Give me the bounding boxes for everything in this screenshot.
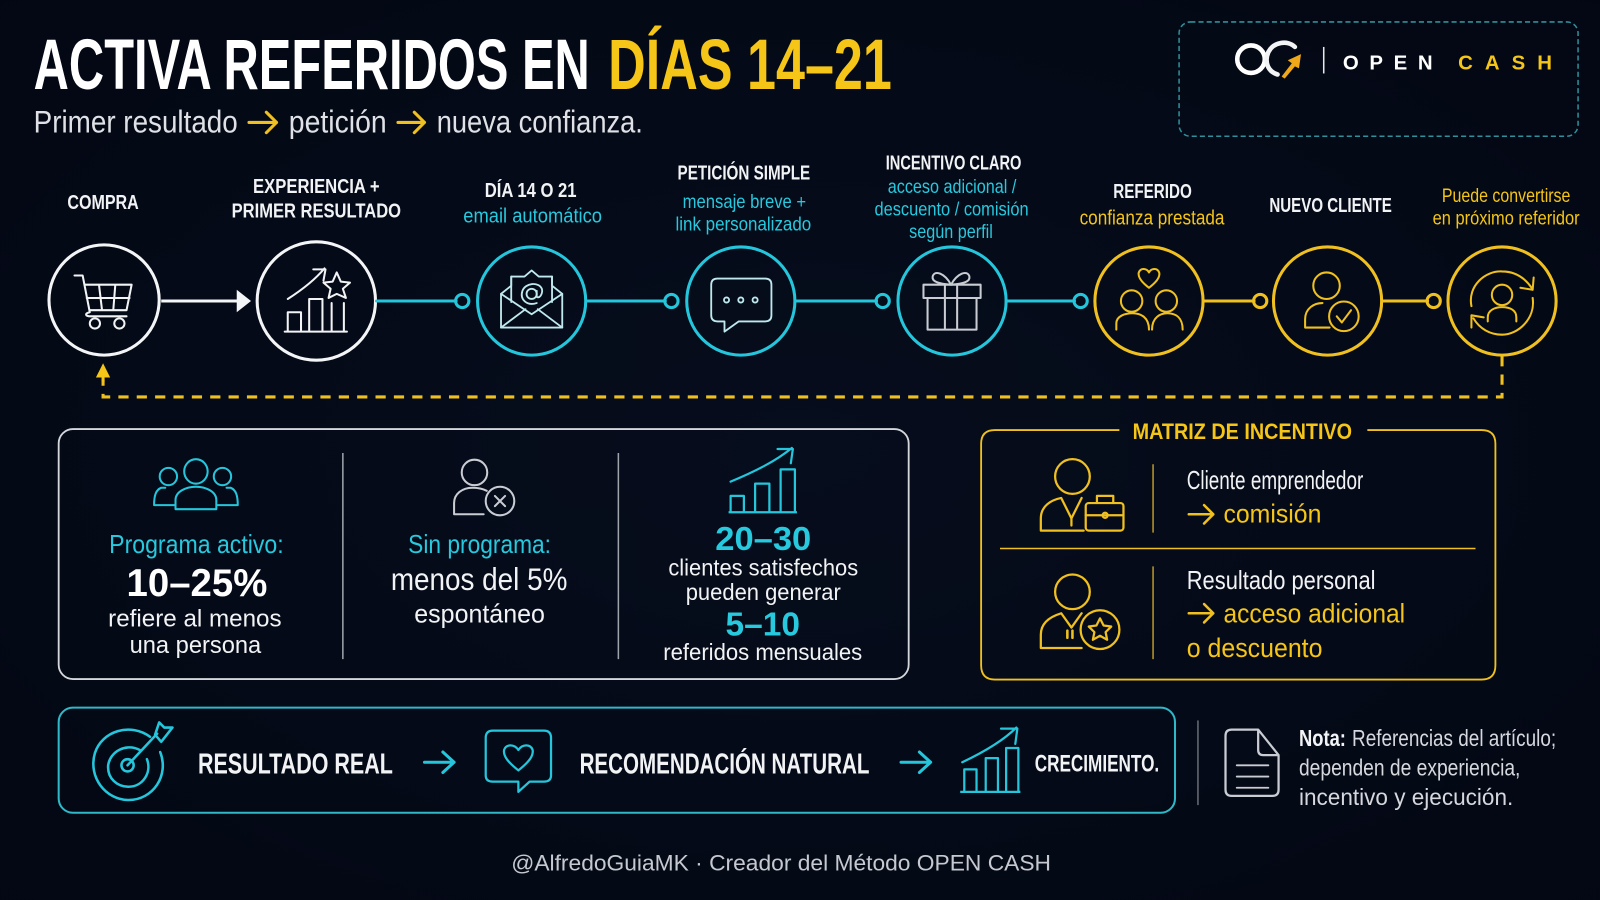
panel: conclusion band: RECOMENDACIÓN NATURAL	[580, 746, 869, 780]
step: referido: confianza prestada	[1080, 207, 1225, 229]
subtitle: nueva confianza.	[437, 104, 643, 140]
note: Referencias del artículo;	[1352, 725, 1556, 751]
stat: programa activo: refiere al menos	[108, 606, 282, 633]
panel: conclusion band	[59, 708, 1175, 813]
stat: programa activo	[108, 459, 284, 659]
step: peticion: PETICIÓN SIMPLE	[678, 161, 810, 185]
row: cliente emprendedor: Cliente emprendedor	[1187, 467, 1364, 495]
step: experiencia: PRIMER RESULTADO	[232, 200, 401, 222]
icon: person with x	[454, 460, 514, 515]
stat: referidos mensuales: pueden generar	[686, 579, 841, 605]
row: resultado personal: acceso adicional	[1223, 598, 1405, 628]
footer: @AlfredoGuiaMK · Creador del Método OPEN CASH	[511, 850, 1051, 875]
step: referido: REFERIDO	[1113, 181, 1192, 203]
row: resultado personal: Resultado personal	[1187, 567, 1376, 595]
stat: referidos mensuales: referidos mensuales	[663, 639, 862, 665]
icon: document	[1226, 730, 1279, 796]
step: incentivo	[874, 152, 1029, 355]
step: peticion: mensaje breve +	[683, 191, 806, 213]
stat: referidos mensuales: clientes satisfechos	[668, 555, 858, 581]
subtitle: petición	[289, 104, 387, 140]
stat: programa activo: una persona	[130, 632, 262, 659]
icon: person cycle	[1471, 271, 1534, 335]
connector 7-8	[1383, 294, 1440, 308]
logo box: CASH	[1458, 52, 1552, 74]
panel: conclusion band: CRECIMIENTO.	[1035, 750, 1159, 777]
subtitle: Primer resultado	[34, 104, 238, 140]
step: peticion: link personalizado	[676, 214, 811, 236]
title: ACTIVA REFERIDOS EN	[34, 25, 590, 105]
step: peticion	[676, 161, 811, 355]
step: dia 14 o 21: DÍA 14 O 21	[485, 179, 577, 202]
icon: heart bubble	[486, 731, 551, 792]
step: incentivo: acceso adicional /	[888, 176, 1017, 198]
row: resultado personal: o descuento	[1187, 633, 1322, 663]
title: DÍAS 14–21	[608, 25, 892, 105]
step: compra: COMPRA	[67, 192, 139, 214]
step: incentivo: INCENTIVO CLARO	[886, 152, 1021, 174]
step: dia 14 o 21	[463, 179, 602, 355]
subtitle	[34, 104, 643, 140]
connector 6-7	[1204, 294, 1267, 308]
arrow: compra to experiencia	[161, 290, 251, 312]
step: experiencia: EXPERIENCIA +	[253, 176, 380, 198]
connector 3-4	[587, 294, 678, 308]
icon: speech bubble	[711, 279, 771, 332]
icon: person with star badge	[1041, 574, 1119, 649]
note: Nota:	[1299, 725, 1346, 751]
dashed return arrow	[96, 356, 1502, 397]
step: referido	[1080, 181, 1225, 355]
step: experiencia	[232, 176, 401, 360]
icon: target	[93, 722, 172, 800]
step: incentivo: según perfil	[909, 221, 993, 243]
arrow	[424, 752, 454, 772]
note	[1299, 725, 1556, 810]
logo box: OPEN	[1343, 52, 1433, 74]
note: dependen de experiencia,	[1299, 755, 1520, 781]
icon: growth chart	[960, 728, 1020, 792]
stat: referidos mensuales: 20–30	[715, 521, 811, 558]
step: nuevo cliente	[1269, 195, 1392, 355]
icon: person with briefcase	[1041, 459, 1123, 531]
stat: referidos mensuales: 5–10	[726, 607, 800, 644]
matrix heading: MATRIZ DE INCENTIVO	[1133, 419, 1352, 444]
panel: statistics	[59, 429, 909, 679]
row: cliente emprendedor	[1041, 459, 1364, 531]
stat: sin programa: menos del 5%	[391, 561, 567, 597]
step: dia 14 o 21: email automático	[463, 205, 602, 227]
icon: person check	[1305, 272, 1359, 331]
logo mark	[1237, 43, 1301, 79]
stat: sin programa: espontáneo	[414, 600, 545, 628]
icon: gift	[923, 273, 981, 330]
row: resultado personal	[1041, 567, 1405, 663]
stat: programa activo: Programa activo:	[109, 531, 284, 559]
row: cliente emprendedor: comisión	[1223, 500, 1321, 528]
icon: growth chart	[729, 448, 797, 512]
icon: group	[154, 459, 238, 509]
icon: growth star	[285, 268, 350, 332]
icon: email	[501, 270, 562, 328]
note: incentivo y ejecución.	[1299, 784, 1513, 810]
icon: cart	[74, 276, 132, 329]
step: compra	[49, 192, 159, 355]
panel: conclusion band: RESULTADO REAL	[198, 748, 393, 780]
connector 4-5	[796, 294, 889, 308]
arrow	[901, 752, 931, 772]
step: incentivo: descuento / comisión	[874, 198, 1029, 220]
connector 5-6	[1006, 294, 1087, 308]
stat: referidos mensuales	[663, 448, 862, 665]
panel: matriz de incentivo	[981, 419, 1495, 680]
icon: two people and heart	[1116, 269, 1183, 330]
stat: programa activo: 10–25%	[127, 562, 267, 605]
connector 2-3	[377, 294, 469, 308]
step: proximo referidor: Puede convertirse	[1442, 185, 1570, 207]
stat: sin programa	[391, 460, 567, 628]
stat: sin programa: Sin programa:	[408, 531, 551, 559]
step: nuevo cliente: NUEVO CLIENTE	[1269, 195, 1392, 217]
logo box	[1179, 22, 1578, 136]
step: proximo referidor	[1433, 185, 1580, 355]
